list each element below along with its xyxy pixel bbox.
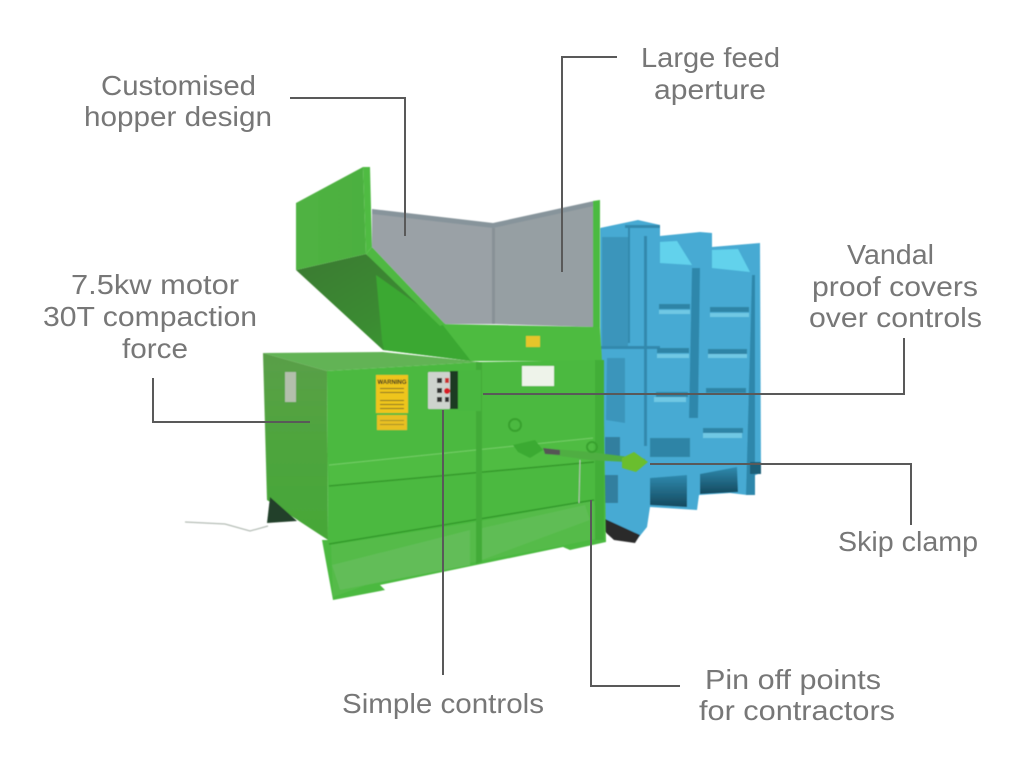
label: pin off points for contractors: for contractors [699, 695, 895, 726]
label: skip clamp: Skip clamp [838, 526, 978, 557]
leader line: motor [153, 378, 310, 422]
hopper left flap [296, 167, 366, 270]
label: motor and compaction force: 7.5kw motor [71, 269, 239, 300]
label: motor and compaction force: 30T compaction [43, 301, 257, 332]
label: motor and compaction force [43, 269, 257, 364]
skip light upper gussets [660, 241, 750, 272]
leader line: vandal proof covers [483, 338, 904, 394]
label: large feed aperture: Large feed [641, 42, 780, 73]
label: pin off points for contractors: Pin off points [705, 664, 881, 695]
skip roller [603, 518, 640, 543]
label: large feed aperture: aperture [654, 74, 766, 105]
lower skirt [331, 500, 600, 597]
label: customised hopper design [84, 70, 272, 132]
label: vandal proof covers over controls [809, 239, 982, 333]
warning labels: WARNING [378, 380, 407, 386]
right hopper edge [593, 200, 600, 330]
product photo: blue skip container [598, 220, 761, 543]
leader line: simple controls [442, 410, 444, 675]
label: large feed aperture [641, 42, 780, 105]
skip horizontal ribs [650, 304, 749, 457]
skip left door panels [602, 237, 628, 503]
leader line: large feed aperture [562, 57, 617, 272]
do not climb label [526, 336, 540, 347]
product photo: green compactor [185, 167, 648, 600]
skip body [598, 220, 761, 542]
machine side face [263, 353, 328, 540]
power cable [185, 522, 268, 531]
hopper grey walls [372, 201, 594, 327]
warning labels [376, 375, 408, 430]
label: simple controls: Simple controls [342, 688, 544, 719]
dark opening under side [267, 497, 297, 523]
label: customised hopper design: Customised [101, 70, 256, 101]
leader line: skip clamp [650, 464, 911, 525]
skip hinge rails [600, 225, 660, 446]
label: vandal proof covers over controls: over controls [809, 302, 982, 333]
machine front face [322, 360, 606, 600]
leader line: pin off points [591, 500, 680, 686]
control box [428, 370, 481, 411]
skip vertical rib shadows [689, 268, 755, 495]
vertical post [476, 362, 482, 564]
clamp arm [509, 419, 648, 503]
label: customised hopper design: hopper design [84, 101, 272, 132]
label: motor and compaction force: force [122, 333, 188, 364]
hopper underside [296, 254, 471, 361]
white nameplate [522, 366, 554, 386]
label: vandal proof covers over controls: proof covers [812, 271, 978, 302]
horizontal beam [329, 438, 594, 485]
label: pin off points for contractors [699, 664, 895, 726]
machine top surface [263, 352, 480, 371]
side panel label [285, 372, 296, 402]
label: vandal proof covers over controls: Vandal [847, 239, 934, 270]
front band below hopper [442, 324, 602, 361]
skip bottom recesses [650, 475, 687, 507]
leader line: customised hopper design [290, 98, 405, 236]
